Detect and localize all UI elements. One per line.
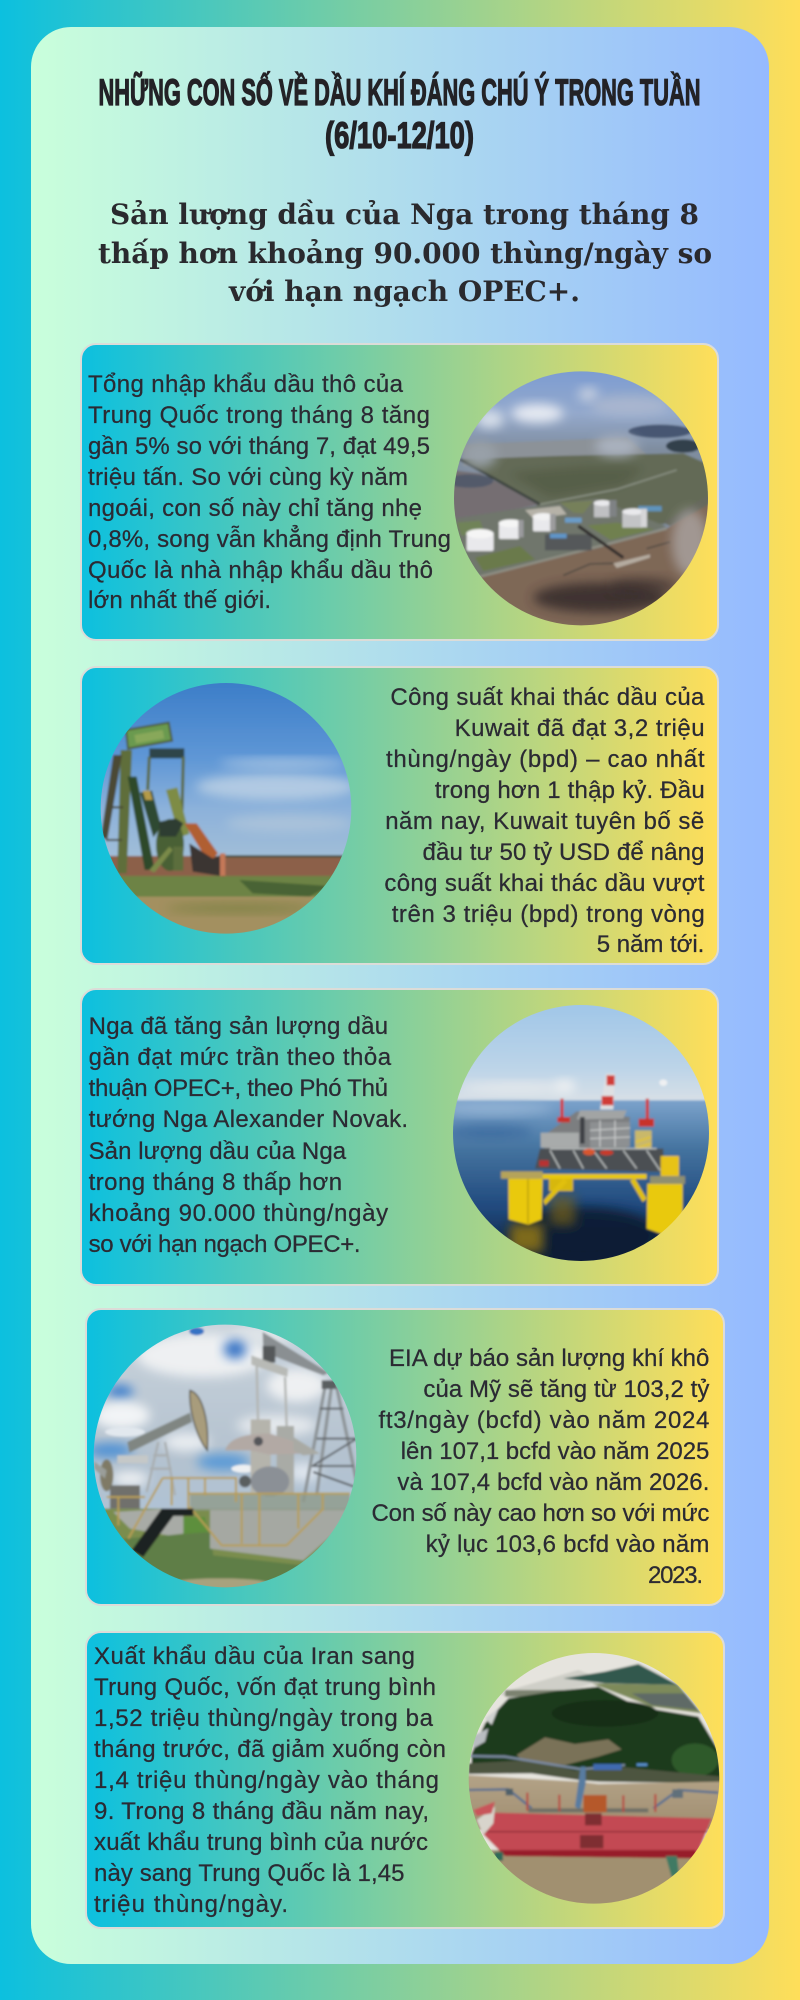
text: China crude imports: gần 5% so với tháng 7, đạt 49,5 [88,433,430,460]
text: Iran exports to China: 9. Trong 8 tháng đầu năm nay, [94,1798,429,1825]
text: Kuwait capacity: đầu tư 50 tỷ USD để nâng [422,839,704,866]
text: Iran exports to China: Xuất khẩu dầu của Iran sang [94,1643,415,1670]
text: Iran exports to China: triệu thùng/ngày. [94,1891,288,1918]
text: Russia output: trong tháng 8 thấp hơn [89,1169,342,1196]
text: Kuwait capacity: 5 năm tới. [597,931,704,958]
text: Kuwait capacity: Công suất khai thác dầu của [390,684,705,711]
text: Russia output: thuận OPEC+, theo Phó Thủ [89,1075,388,1102]
text: EIA dry gas forecast: của Mỹ sẽ tăng từ 103,2 tỷ [423,1376,709,1403]
text: EIA dry gas forecast: ft3/ngày (bcfd) vào năm 2024 [378,1407,709,1434]
text: China crude imports: Tổng nhập khẩu dầu thô của [88,371,404,398]
text: Kuwait capacity: thùng/ngày (bpd) – cao nhất [386,746,705,773]
text: Iran exports to China: Trung Quốc, vốn đạt trung bình [94,1674,436,1701]
text: China crude imports: 0,8%, song vẫn khẳng định Trung [88,524,451,553]
text: Iran exports to China: xuất khẩu trung bình của nước [94,1829,428,1856]
text: Kuwait capacity: công suất khai thác dầu vượt [384,870,705,897]
text: China crude imports: Quốc là nhà nhập khẩu dầu thô [88,557,433,584]
text: Kuwait capacity [384,684,705,958]
text: China crude imports: triệu tấn. So với cùng kỳ năm [88,464,408,491]
text: Iran exports to China: này sang Trung Quốc là 1,45 [94,1860,404,1887]
text: China crude imports: ngoái, con số này chỉ tăng nhẹ [88,495,422,522]
panel: Iran exports to China [86,1632,724,1928]
text: EIA dry gas forecast: EIA dự báo sản lượng khí khô [389,1345,709,1372]
text: Kuwait capacity: năm nay, Kuwait tuyên bố sẽ [385,808,704,835]
text: Iran exports to China: 1,4 triệu thùng/ngày vào tháng [94,1767,439,1794]
subtitle: với hạn ngạch OPEC+. [228,275,580,308]
text: Kuwait capacity: Kuwait đã đạt 3,2 triệu [455,715,705,742]
photo: rusty pump jack on a field [96,680,356,943]
panel: China crude imports [81,344,718,640]
text: Iran exports to China: 1,52 triệu thùng/ngày trong ba [94,1705,434,1732]
text: Russia output: so với hạn ngạch OPEC+. [89,1231,361,1258]
text: Russia output: Nga đã tăng sản lượng dầu [89,1013,388,1040]
text: China crude imports: lớn nhất thế giới. [88,587,271,614]
text: EIA dry gas forecast [372,1345,709,1589]
text: Russia output: Sản lượng dầu của Nga [89,1138,347,1165]
text: Iran exports to China [94,1643,446,1918]
subtitle: thấp hơn khoảng 90.000 thùng/ngày so [98,237,712,270]
text: EIA dry gas forecast: Con số này cao hơn so với mức [372,1500,709,1527]
photo: oil tanker at terminal [465,1650,723,1908]
text: China crude imports [88,371,451,614]
text: Russia output: tướng Nga Alexander Novak. [89,1106,408,1133]
text: China crude imports: Trung Quốc trong tháng 8 tăng [88,402,430,429]
text: EIA dry gas forecast: và 107,4 bcfd vào năm 2026. [397,1469,709,1496]
text: Kuwait capacity: trong hơn 1 thập kỷ. Đầu [435,777,705,804]
subtitle: Sản lượng dầu của Nga trong tháng 8 [110,198,699,231]
title: (6/10-12/10) [325,115,474,156]
text: Russia output: khoảng 90.000 thùng/ngày [89,1200,388,1227]
panel: Russia output [81,989,718,1285]
text: Russia output [89,1013,408,1258]
text: Kuwait capacity: trên 3 triệu (bpd) trong vòng [392,901,705,928]
photo: offshore platform [453,1005,709,1261]
text: Russia output: gần đạt mức trần theo thỏa [89,1044,392,1071]
text: EIA dry gas forecast: 2023. [648,1562,703,1589]
photo: oil pump jacks under cloudy sky [87,1322,360,1592]
photo: LNG terminal aerial [447,366,712,628]
title [98,71,700,156]
text: EIA dry gas forecast: kỷ lục 103,6 bcfd vào năm [426,1531,709,1558]
subtitle [98,198,712,308]
text: Iran exports to China: tháng trước, đã giảm xuống còn [94,1736,446,1763]
panel: EIA dry gas forecast [86,1309,724,1605]
text: EIA dry gas forecast: lên 107,1 bcfd vào năm 2025 [401,1438,709,1465]
panel: Kuwait capacity [81,667,718,964]
